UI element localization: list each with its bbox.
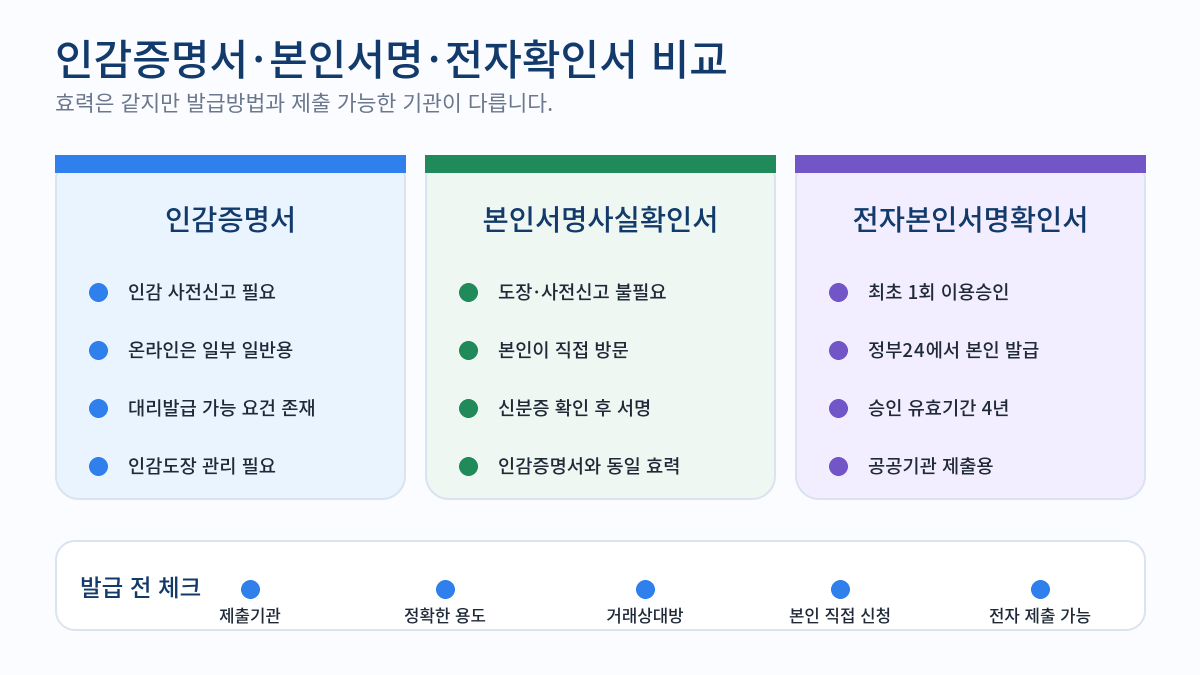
subtitle: 효력은 같지만 발급방법과 제출 가능한 기관이 다릅니다.	[55, 87, 553, 118]
panel: 인감증명서: 온라인은 일부 일반용	[128, 336, 293, 363]
panel: 전자본인서명확인서: 승인 유효기간 4년	[868, 394, 1009, 421]
check item: 본인 직접 신청: 본인 직접 신청	[789, 603, 891, 627]
panel: 전자본인서명확인서: 전자본인서명확인서	[852, 198, 1088, 239]
panel: 본인서명사실확인서: 본인서명사실확인서	[482, 198, 718, 239]
title: 인감증명서·본인서명·전자확인서 비교	[55, 27, 728, 88]
checklist heading: 발급 전 체크	[80, 569, 201, 603]
check item: 거래상대방	[606, 580, 684, 627]
panel: 본인서명사실확인서	[425, 155, 776, 500]
panel: 발급 전 체크	[55, 540, 1146, 631]
check item: 정확한 용도: 정확한 용도	[404, 603, 486, 627]
panel: 전자본인서명확인서	[795, 155, 1146, 500]
panel: 전자본인서명확인서: 공공기관 제출용	[868, 452, 994, 479]
panel: 인감증명서	[55, 155, 406, 500]
check item: 전자 제출 가능	[989, 580, 1091, 627]
panel: 전자본인서명확인서: 정부24에서 본인 발급	[868, 336, 1039, 363]
check item: 본인 직접 신청	[789, 580, 891, 627]
check item: 정확한 용도	[404, 580, 486, 627]
panel: 인감증명서: 인감증명서	[165, 198, 296, 239]
panel: 본인서명사실확인서: 도장·사전신고 불필요	[498, 278, 667, 305]
panel: 인감증명서: 인감 사전신고 필요	[128, 278, 276, 305]
check item: 전자 제출 가능: 전자 제출 가능	[989, 603, 1091, 627]
panel: 본인서명사실확인서: 신분증 확인 후 서명	[498, 394, 651, 421]
panel: 전자본인서명확인서: 최초 1회 이용승인	[868, 278, 1009, 305]
check item: 거래상대방: 거래상대방	[606, 603, 684, 627]
check item: 제출기관	[219, 580, 281, 627]
panel: 본인서명사실확인서: 인감증명서와 동일 효력	[498, 452, 680, 479]
panel: 인감증명서: 대리발급 가능 요건 존재	[128, 394, 316, 421]
check item: 제출기관: 제출기관	[219, 603, 281, 627]
panel: 본인서명사실확인서: 본인이 직접 방문	[498, 336, 629, 363]
panel: 인감증명서: 인감도장 관리 필요	[128, 452, 276, 479]
